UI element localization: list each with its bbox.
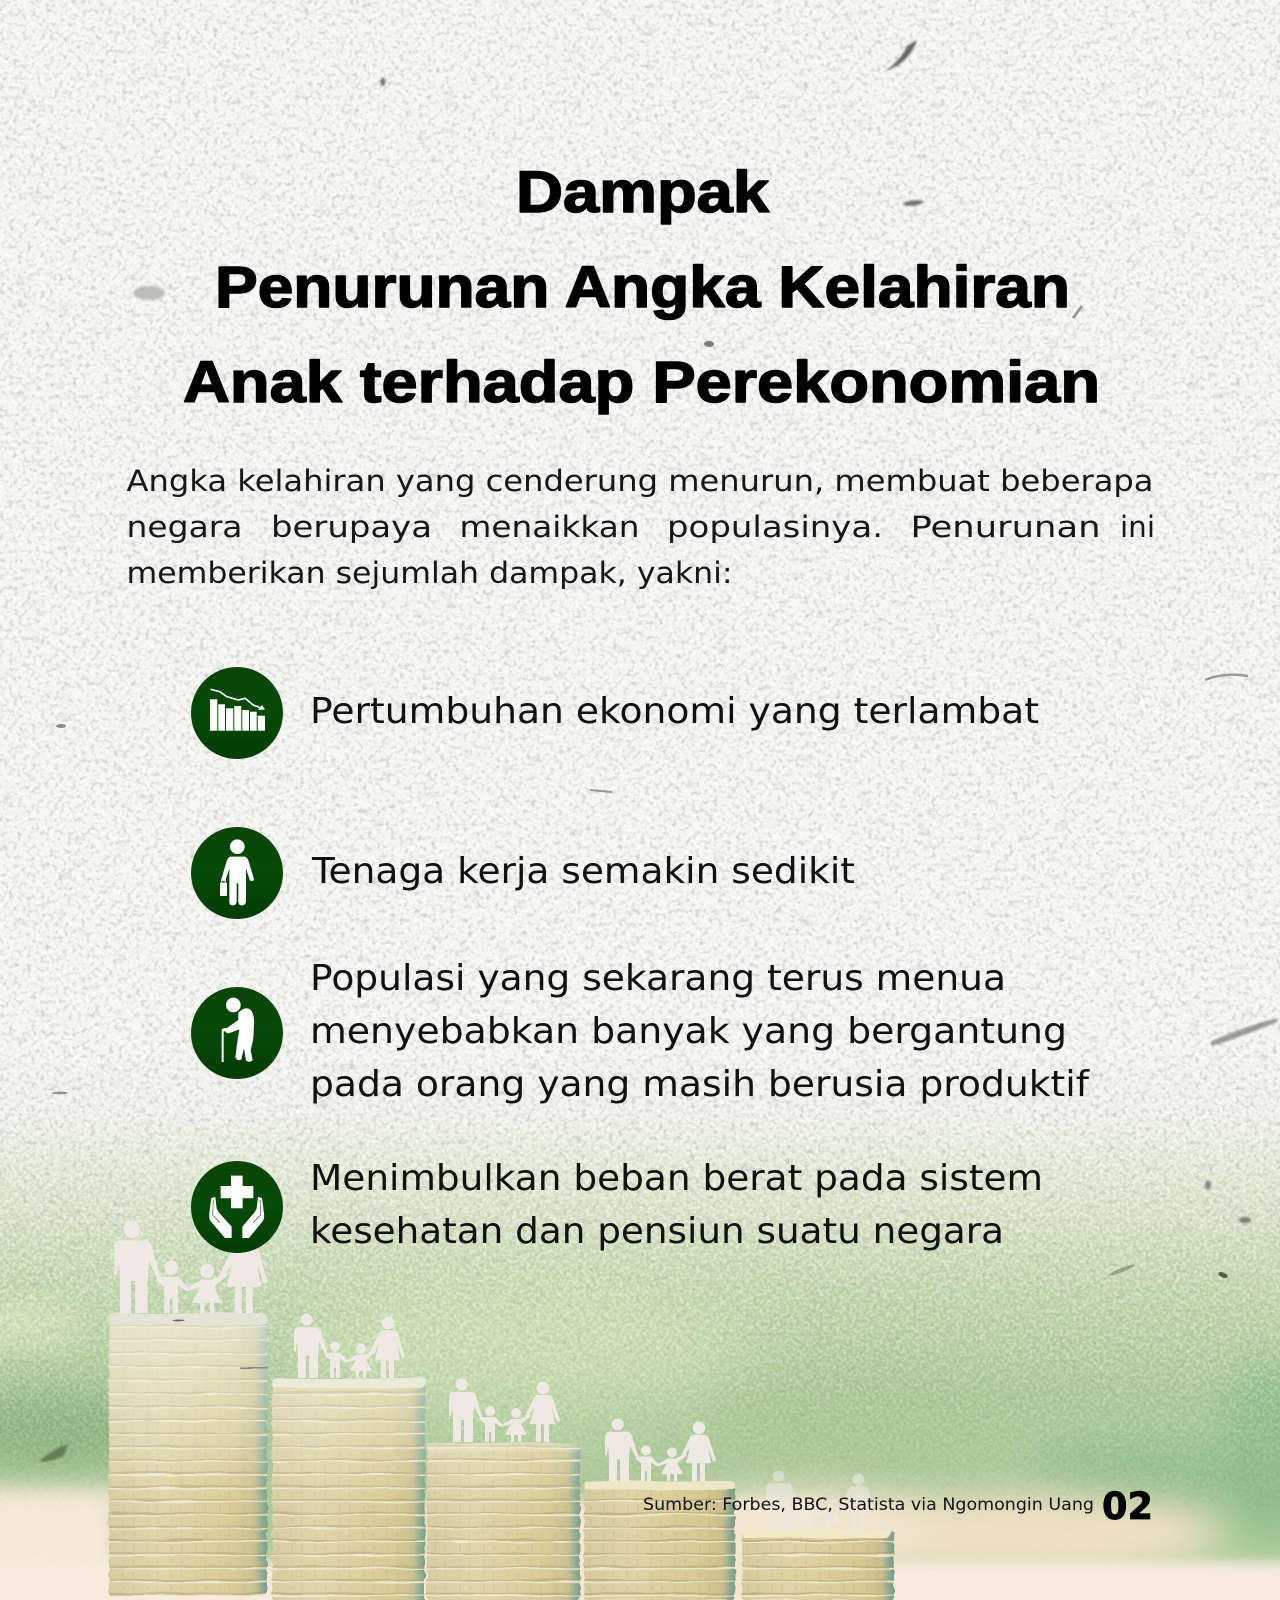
coin stack 4 <box>584 1481 735 1600</box>
item 2 text: Tenaga kerja semakin sedikit <box>311 851 855 892</box>
intro paragraph: Penurunan <box>910 510 1100 544</box>
intro paragraph: negara <box>126 510 242 544</box>
item 3 text: Populasi yang sekarang terus menua <box>310 958 1006 999</box>
family figures on stack 2 <box>294 1314 405 1378</box>
intro paragraph: berupaya <box>271 510 432 544</box>
title: Anak terhadap Perekonomian <box>183 350 1100 415</box>
intro paragraph <box>126 464 1155 590</box>
title <box>183 160 1100 415</box>
family figures on stack 5 <box>766 1470 875 1530</box>
coin stacks <box>109 1313 894 1600</box>
family figures on stack 1 <box>114 1221 268 1313</box>
title: Dampak <box>516 160 770 225</box>
title: Penurunan Angka Kelahiran <box>215 255 1070 320</box>
icon: cross with caring hands <box>191 1161 283 1253</box>
page number: 02 <box>1102 1485 1153 1528</box>
icon: elderly person with cane <box>191 987 283 1079</box>
coin stack 5 <box>742 1530 894 1600</box>
item 4: health and pension burden <box>191 1158 1043 1253</box>
source note: Sumber: Forbes, BBC, Statista via Ngomongin Uang <box>643 1495 1094 1514</box>
coin stack 3 <box>427 1442 580 1600</box>
item 3 text <box>310 958 1090 1105</box>
family figures on stack 4 <box>605 1418 716 1481</box>
item 3: ageing population <box>191 958 1090 1105</box>
icon: declining bar chart <box>191 667 283 759</box>
icon: worker with briefcase <box>191 827 283 919</box>
item 3 text: pada orang yang masih berusia produktif <box>310 1064 1090 1105</box>
family figures on stack 3 <box>449 1378 560 1442</box>
item 4 text: kesehatan dan pensiun suatu negara <box>310 1211 1004 1252</box>
coin stack 1 <box>109 1313 268 1596</box>
item 2: shrinking workforce <box>191 827 855 919</box>
coin stack 2 <box>272 1378 425 1600</box>
item 3 text: menyebabkan banyak yang bergantung <box>310 1011 1067 1052</box>
intro paragraph: menaikkan <box>460 510 640 544</box>
intro paragraph: ini <box>1120 510 1155 544</box>
intro paragraph: Angka kelahiran yang cenderung menurun, membuat beberapa <box>126 464 1154 498</box>
intro paragraph: populasinya. <box>667 510 883 544</box>
item 4 text: Menimbulkan beban berat pada sistem <box>310 1158 1043 1199</box>
item 1 text: Pertumbuhan ekonomi yang terlambat <box>310 691 1039 732</box>
item 4 text <box>310 1158 1043 1252</box>
intro paragraph: memberikan sejumlah dampak, yakni: <box>126 556 732 590</box>
item 1: slow economic growth <box>191 667 1039 759</box>
